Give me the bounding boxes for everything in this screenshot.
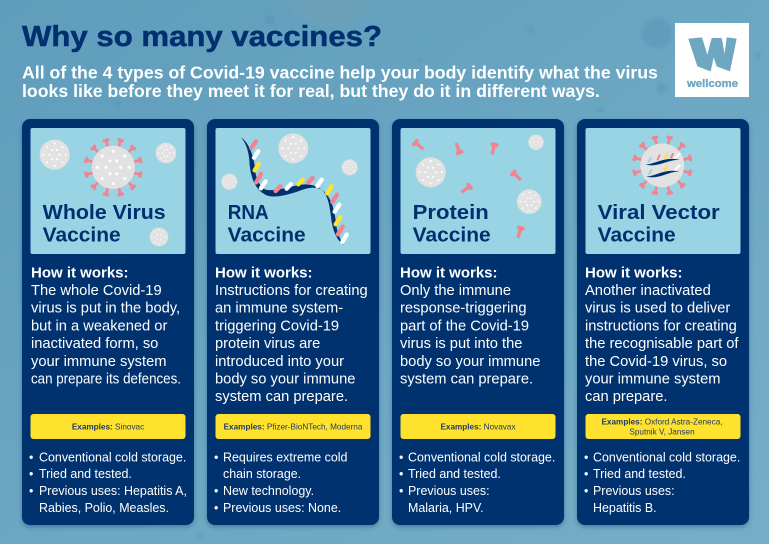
panel heading: Vaccine	[598, 225, 676, 247]
how it works text	[585, 264, 739, 405]
bullet list: Rabies, Polio, Measles.	[39, 501, 169, 515]
how it works text: Another inactivated	[585, 283, 711, 299]
how it works text: How it works:	[585, 264, 683, 282]
bullet list: •	[29, 450, 33, 464]
bullet list	[399, 450, 555, 515]
how it works text: system can prepare.	[400, 372, 533, 388]
bullet list: Requires extreme cold	[223, 450, 348, 464]
how it works text: part of the Covid-19	[400, 318, 529, 334]
bullet list: Tried and tested.	[593, 467, 686, 481]
bullet list: •	[399, 450, 403, 464]
how it works text	[400, 264, 540, 388]
how it works text: The whole Covid-19	[31, 283, 162, 299]
icon: protein spikes	[411, 135, 544, 239]
how it works text: your immune system	[585, 372, 720, 388]
panel heading	[228, 202, 306, 247]
how it works text: protein virus are	[215, 336, 320, 352]
how it works text	[31, 264, 181, 388]
intro text: All of the 4 types of Covid-19 vaccine help your body identify what the virus	[22, 62, 658, 82]
bullet list: Hepatitis B.	[593, 501, 657, 515]
bullet list: •	[29, 484, 33, 498]
panel: rna vaccine	[207, 119, 379, 525]
panel heading: Vaccine	[228, 225, 306, 247]
how it works text: your immune system	[31, 354, 166, 370]
how it works text: triggering Covid-19	[215, 318, 339, 334]
how it works text: virus is used to deliver	[585, 301, 730, 317]
bullet list: Conventional cold storage.	[593, 450, 740, 464]
bullet list: •	[214, 501, 218, 515]
panel heading: Protein	[413, 202, 489, 224]
how it works text: an immune system-	[215, 301, 343, 317]
how it works text: How it works:	[400, 264, 498, 282]
bullet list: Previous uses: Hepatitis A,	[39, 484, 187, 498]
how it works text: response-triggering	[400, 301, 527, 317]
how it works text: the Covid-19 virus, so	[585, 354, 727, 370]
bullet list: Tried and tested.	[408, 467, 501, 481]
panel heading	[413, 202, 491, 247]
bullet list: Previous uses: None.	[223, 501, 341, 515]
how it works text: can prepare.	[585, 389, 667, 405]
bullet list: •	[399, 467, 403, 481]
panel: whole virus vaccine	[22, 119, 194, 525]
how it works text: Only the immune	[400, 283, 511, 299]
how it works text: the recognisable part of	[585, 336, 739, 352]
how it works text: How it works:	[215, 264, 313, 282]
bullet list: •	[214, 484, 218, 498]
bullet list: Conventional cold storage.	[39, 450, 186, 464]
panel: protein vaccine	[392, 119, 564, 525]
panel: viral vector vaccine	[577, 119, 749, 525]
title: Why so many vaccines?	[22, 21, 382, 53]
bullet list: •	[29, 467, 33, 481]
panel heading: Whole Virus	[43, 202, 166, 224]
examples box: Examples: Novavax	[440, 422, 516, 432]
bullet list: Previous uses:	[593, 484, 675, 498]
bullet list	[214, 450, 348, 515]
bullet list	[29, 450, 187, 515]
examples box: Examples: Sinovac	[72, 422, 144, 432]
bullet list: •	[399, 484, 403, 498]
bullet list: New technology.	[223, 484, 314, 498]
bullet list: •	[584, 484, 588, 498]
logo: wellcome	[675, 23, 749, 97]
how it works text: body so your immune	[215, 372, 355, 388]
how it works text: How it works:	[31, 264, 129, 282]
icon: whole virus	[40, 138, 176, 246]
panel heading: Vaccine	[43, 225, 121, 247]
bullet list	[584, 450, 740, 515]
bullet list: Tried and tested.	[39, 467, 132, 481]
bullet list: Malaria, HPV.	[408, 501, 484, 515]
icon: viral vector	[632, 135, 692, 195]
bullet list: •	[584, 450, 588, 464]
panel heading	[43, 202, 166, 247]
how it works text: virus is put into the	[400, 336, 522, 352]
intro text: looks like before they meet it for real, but they do it in different ways.	[22, 81, 600, 101]
how it works text	[215, 264, 368, 405]
examples box	[400, 414, 556, 439]
how it works text: system can prepare.	[215, 389, 348, 405]
how it works text: body so your immune	[400, 354, 540, 370]
bullet list: Previous uses:	[408, 484, 490, 498]
examples box: Examples: Pfizer-BioNTech, Moderna	[224, 422, 363, 432]
how it works text: but in a weakened or	[31, 318, 167, 334]
intro text	[22, 62, 658, 101]
how it works text: virus is put in the body,	[31, 301, 180, 317]
icon: rna strand	[221, 133, 358, 245]
how it works text: inactivated form, so	[31, 336, 158, 352]
panel heading: RNA	[228, 202, 269, 224]
examples box: Examples: Oxford Astra-Zeneca,	[601, 418, 723, 426]
panel heading: Viral Vector	[598, 202, 720, 224]
bullet list: •	[584, 467, 588, 481]
how it works text: instructions for creating	[585, 318, 737, 334]
examples box: Sputnik V, Jansen	[629, 428, 695, 436]
examples box	[30, 414, 186, 439]
bullet list: chain storage.	[223, 467, 301, 481]
how it works text: can prepare its defences.	[31, 372, 181, 388]
bullet list: •	[214, 450, 218, 464]
panel heading: Vaccine	[413, 225, 491, 247]
panel heading	[598, 202, 720, 247]
bullet list: Conventional cold storage.	[408, 450, 555, 464]
logo: wellcome: wellcome	[686, 78, 738, 90]
how it works text: introduced into your	[215, 354, 344, 370]
examples box	[216, 414, 370, 439]
how it works text: Instructions for creating	[215, 283, 368, 299]
examples box	[586, 414, 740, 439]
